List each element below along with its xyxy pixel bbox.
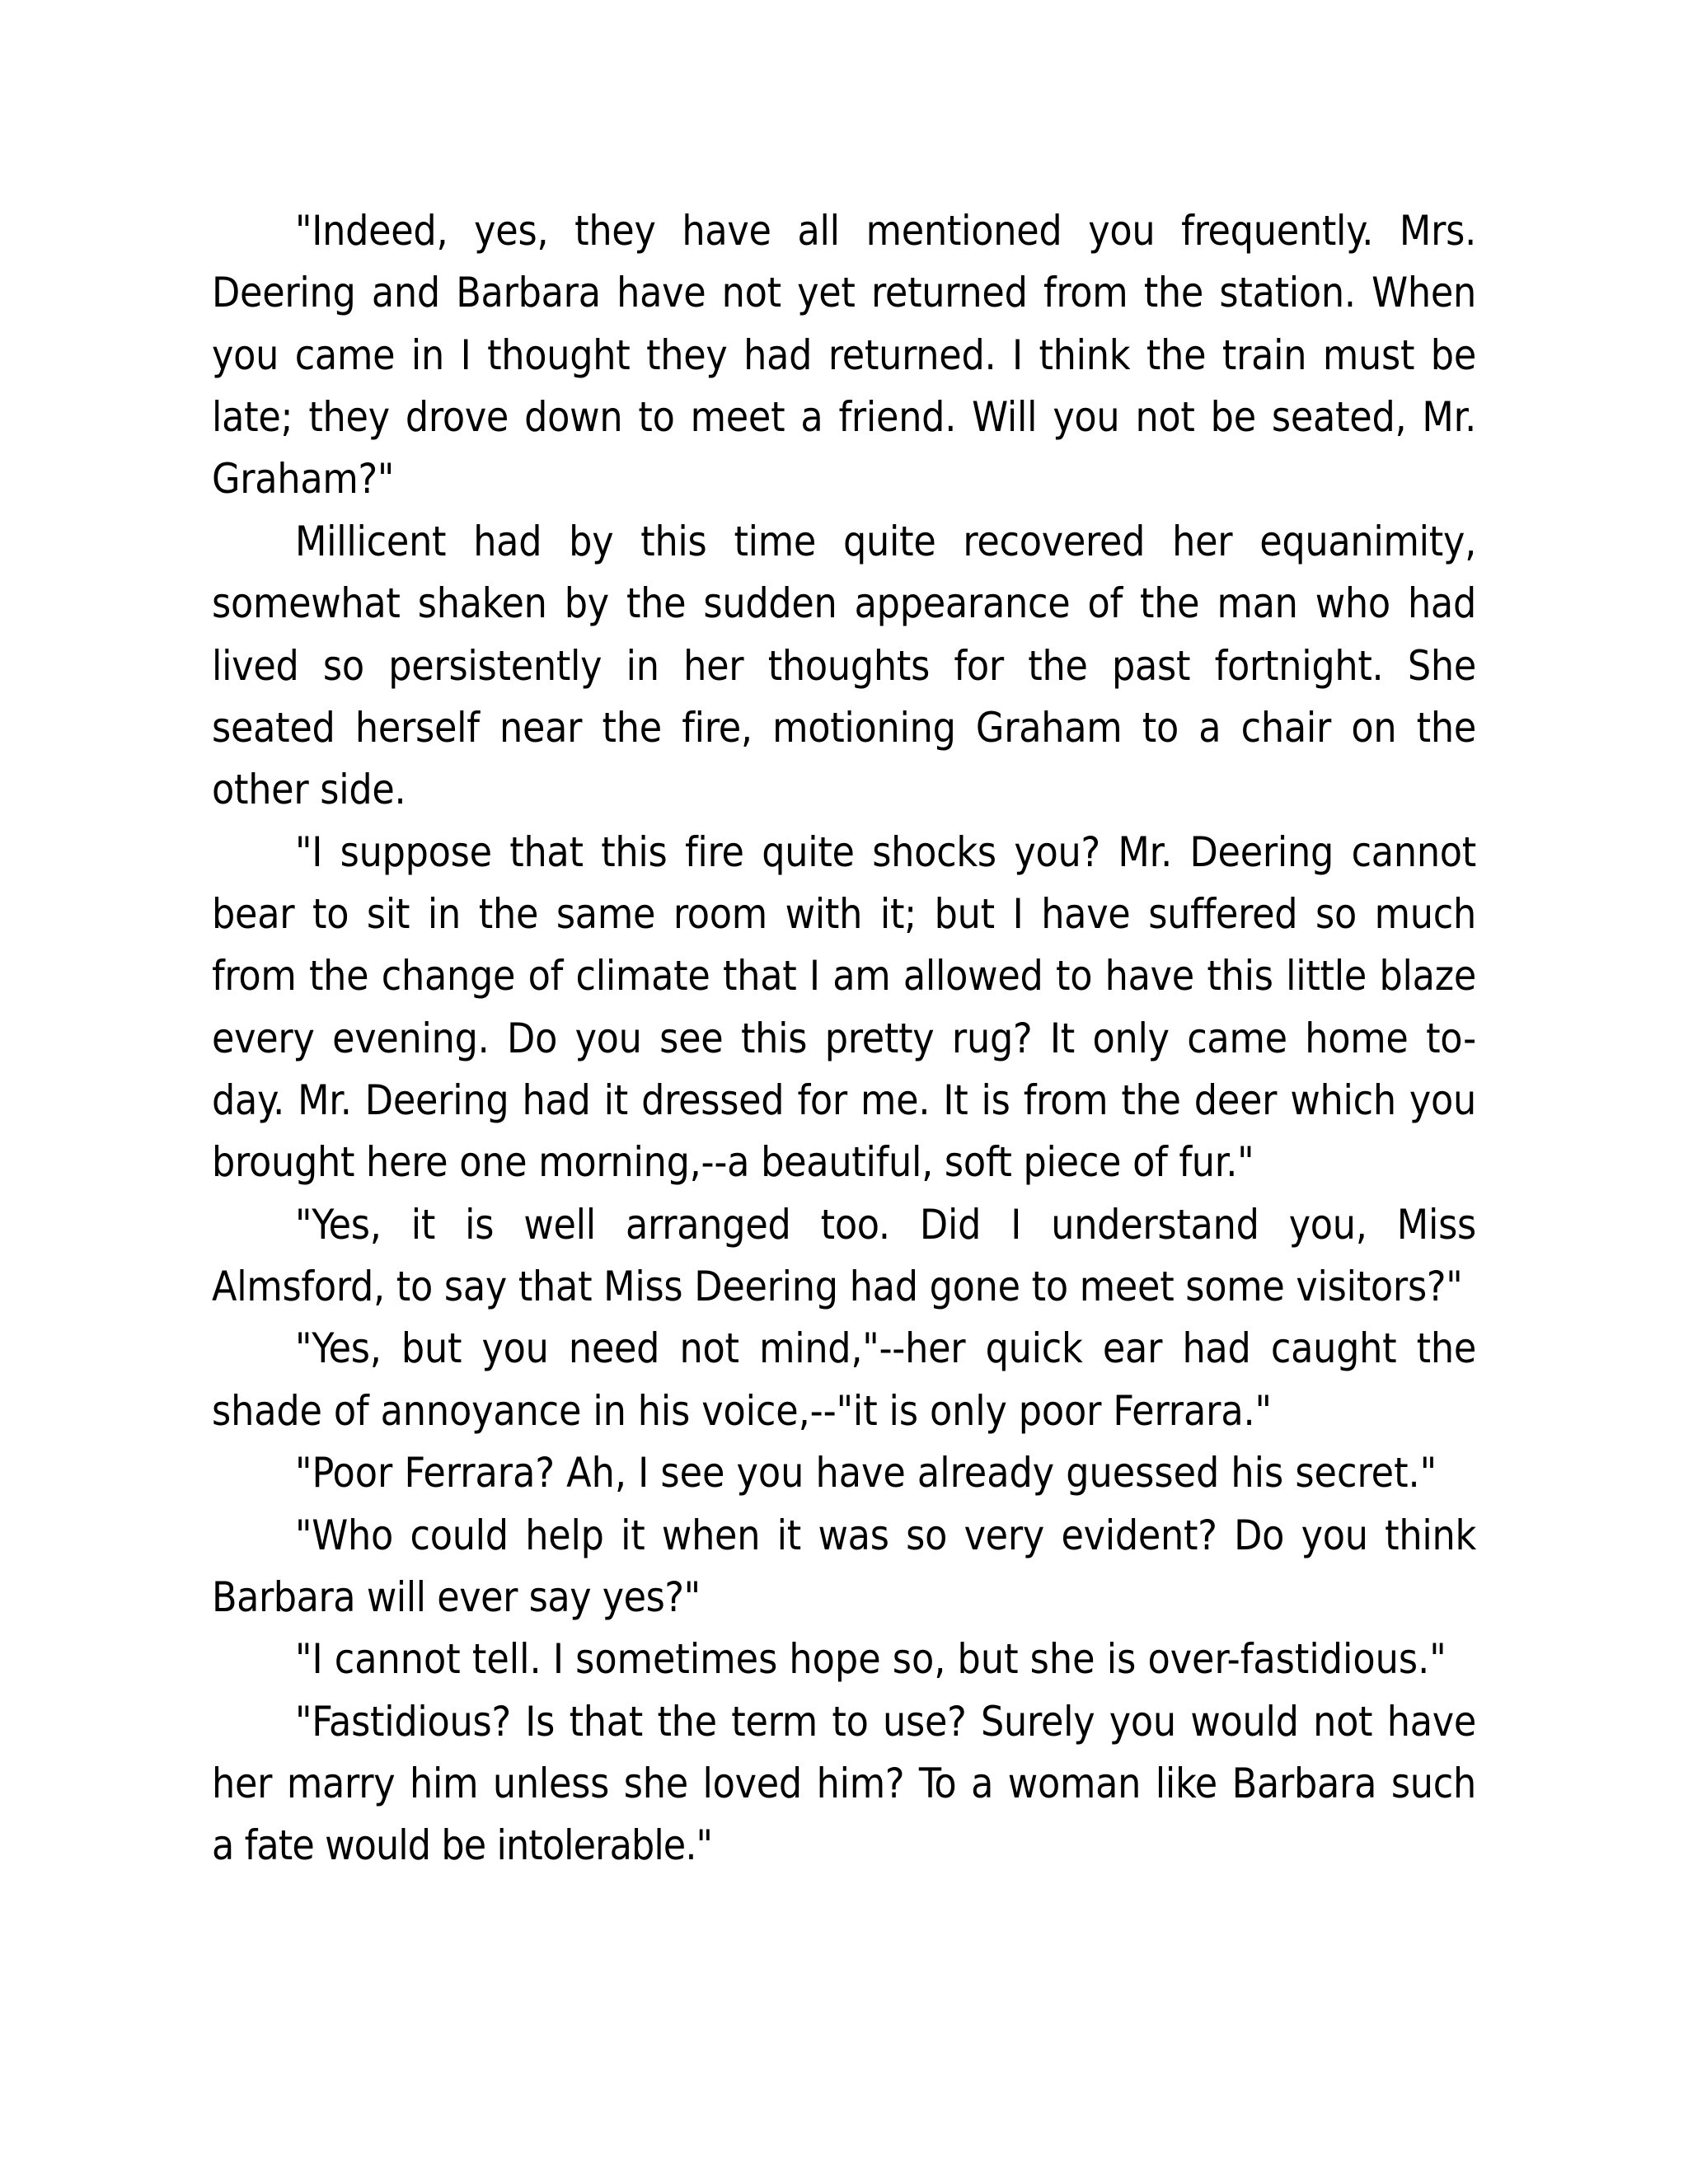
paragraph 1: late; they drove down to meet a friend. Will you not be seated, Mr. <box>212 393 1476 441</box>
paragraph 3: brought here one morning,--a beautiful, soft piece of fur." <box>212 1138 1254 1186</box>
paragraph 3 <box>212 828 1476 1186</box>
paragraph 1: Graham?" <box>212 455 394 503</box>
paragraph 6: "Poor Ferrara? Ah, I see you have already guessed his secret." <box>295 1449 1437 1497</box>
paragraph 5: "Yes, but you need not mind,"--her quick ear had caught the <box>295 1324 1476 1372</box>
paragraph 2: other side. <box>212 766 406 813</box>
paragraph 1 <box>212 207 1476 503</box>
paragraph 9: her marry him unless she loved him? To a woman like Barbara such <box>212 1760 1476 1807</box>
paragraph 3: every evening. Do you see this pretty rug? It only came home to- <box>212 1015 1476 1062</box>
paragraph 2: Millicent had by this time quite recovered her equanimity, <box>295 518 1476 565</box>
paragraph 2: lived so persistently in her thoughts for the past fortnight. She <box>212 642 1476 690</box>
paragraph 7: Barbara will ever say yes?" <box>212 1573 701 1621</box>
paragraph 3: day. Mr. Deering had it dressed for me. It is from the deer which you <box>212 1076 1476 1124</box>
paragraph 3: "I suppose that this fire quite shocks you? Mr. Deering cannot <box>295 828 1476 876</box>
paragraph 7 <box>212 1511 1477 1621</box>
paragraph 7: "Who could help it when it was so very evident? Do you think <box>295 1511 1476 1559</box>
paragraph 1: you came in I thought they had returned. I think the train must be <box>212 331 1476 379</box>
paragraph 3: from the change of climate that I am allowed to have this little blaze <box>212 952 1476 1000</box>
paragraph 2 <box>212 518 1476 813</box>
paragraph 9: "Fastidious? Is that the term to use? Surely you would not have <box>295 1698 1476 1746</box>
paragraph 3: bear to sit in the same room with it; but I have suffered so much <box>212 890 1476 938</box>
paragraph 9 <box>212 1698 1476 1869</box>
paragraph 5 <box>212 1324 1476 1435</box>
paragraph 1: Deering and Barbara have not yet returned from the station. When <box>212 269 1476 316</box>
paragraph 1: "Indeed, yes, they have all mentioned you frequently. Mrs. <box>295 207 1476 255</box>
paragraph 9: a fate would be intolerable." <box>212 1821 712 1869</box>
paragraph 2: somewhat shaken by the sudden appearance of the man who had <box>212 579 1476 627</box>
paragraph 5: shade of annoyance in his voice,--"it is only poor Ferrara." <box>212 1387 1272 1435</box>
paragraph 4: "Yes, it is well arranged too. Did I understand you, Miss <box>295 1201 1476 1249</box>
paragraph 4 <box>212 1201 1476 1310</box>
paragraph 2: seated herself near the fire, motioning Graham to a chair on the <box>212 704 1476 752</box>
paragraph 8: "I cannot tell. I sometimes hope so, but she is over-fastidious." <box>295 1635 1447 1683</box>
text block: book page <box>212 207 1477 1869</box>
paragraph 4: Almsford, to say that Miss Deering had gone to meet some visitors?" <box>212 1263 1463 1310</box>
